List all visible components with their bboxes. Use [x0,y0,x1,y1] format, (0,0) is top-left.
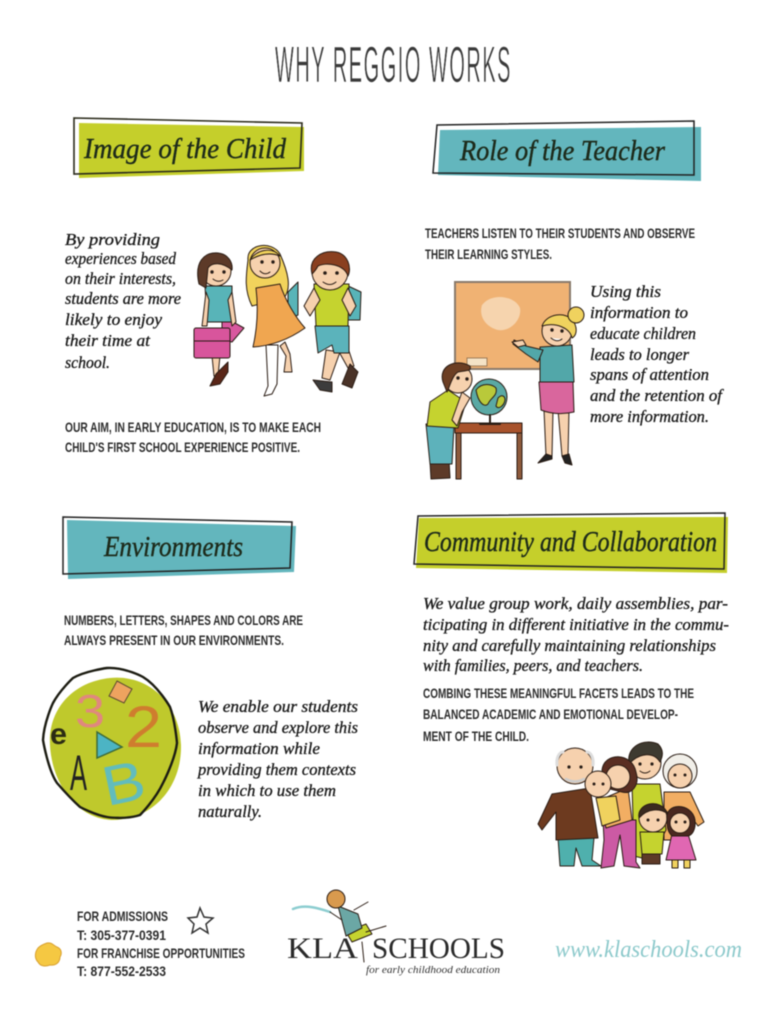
panel: environments [43,517,358,821]
heading: image of the child: Image of the Child [83,133,286,165]
board [455,282,570,369]
letter: B: B [97,748,151,818]
text: using this information: leads to longer [590,345,689,364]
text: we value group work: ticipating in different initiative in the commu- [423,615,729,634]
girl with pink bag [194,253,244,386]
teacher [512,307,584,465]
text: using this information [590,282,724,426]
text: teachers listen [425,225,695,262]
text: using this information: Using this [590,282,661,301]
grandfather [538,748,601,866]
text: we enable: We enable our students [198,697,358,716]
heading: image of the child [74,118,304,178]
text: numbers, letters [64,612,303,648]
text: combing these facets [423,685,694,744]
footer: contact details [35,908,245,979]
text: admissions and franchise phones: FOR ADMISSIONS [77,908,168,924]
icon: yellow blob [35,943,61,966]
boy at globe [426,363,472,479]
text: we enable: information while [198,739,320,758]
text: interests [65,230,181,372]
text: interests: experiences based [65,249,176,268]
heading: environments [63,517,296,579]
grandmother [663,754,704,840]
text: we value group work: We value group work, daily assemblies, par- [423,594,728,613]
heading: role of the teacher: Role of the Teacher [459,135,666,167]
text: admissions and franchise phones: T: 877-552-2533 [77,963,166,979]
icon: star [188,908,213,933]
boy with backpack [304,252,361,392]
panel: image of the child [65,118,361,455]
illustration: three children with backpacks [194,245,361,396]
table [455,423,522,479]
text: numbers, letters: NUMBERS, LETTERS, SHAPES AND COLORS ARE [64,612,303,628]
text: we enable: providing them contexts [197,760,356,779]
letter: e: e [50,718,67,751]
wordmark: SCHOOLS: SCHOOLS [372,932,505,965]
text: interests: students are more [65,289,181,308]
text: we enable: observe and explore this [198,718,358,737]
heading: community and collaboration: Community and Collaboration [424,527,717,558]
text: interests: their time at [65,331,151,350]
text: we enable: in which to use them [198,781,336,800]
text: we enable: naturally. [198,802,262,821]
text: we value group work: with families, peers, and teachers. [423,656,643,675]
heading: environments: Environments [103,531,243,563]
shape: blue triangle [97,732,122,758]
girl [666,806,696,868]
text: using this information: spans of attention [590,365,709,384]
text: using this information: information to [590,303,688,322]
text: interests: on their interests, [65,269,176,288]
text: admissions and franchise phones: FOR FRANCHISE OPPORTUNITIES [77,945,245,961]
icon: running kid [293,890,386,962]
text: using this information: and the retention of [590,386,724,405]
globe [471,379,507,424]
text: we value group work: nity and carefully maintaining relationships [423,636,716,655]
text: interests: school. [65,353,110,372]
father [629,742,666,860]
boy [639,804,668,864]
illustration: family [538,742,704,868]
website: www.klaschools.com [555,937,742,963]
text: we value group work [423,594,729,675]
text: our aim [65,419,321,455]
text: numbers, letters: ALWAYS PRESENT IN OUR ENVIRONMENTS. [64,632,284,648]
text: our aim: OUR AIM, IN EARLY EDUCATION, IS TO MAKE EACH [65,419,321,435]
illustration: teacher, board, boy and globe [426,282,584,479]
logo: KLA Schools [287,890,505,976]
text: interests: likely to enjoy [65,310,162,329]
panel: role of the teacher [425,121,724,479]
text: our aim: CHILD'S FIRST SCHOOL EXPERIENCE POSITIVE. [65,439,300,455]
mother and baby [585,757,640,868]
tagline: for early childhood education [366,964,501,976]
text: combing these facets: MENT OF THE CHILD. [423,728,529,744]
text: using this information: educate children [590,324,696,343]
girl in orange dress [246,245,305,396]
number: 3: 3 [75,685,105,737]
text: admissions and franchise phones [77,908,245,979]
icon: letters and shapes circle [43,668,181,820]
wordmark: KLA: KLA [287,932,358,965]
number: 2: 2 [125,695,162,760]
letter: A: A [70,745,87,801]
text: using this information: more information. [590,407,709,426]
panel: community and collaboration [414,513,729,868]
text: teachers listen: THEIR LEARNING STYLES. [425,246,552,262]
heading: role of the teacher [433,121,701,181]
text: admissions and franchise phones: T: 305-377-0391 [77,927,166,943]
text: interests: By providing [65,230,160,249]
text: we enable [197,697,358,821]
shape: orange square [109,681,132,703]
heading: community and collaboration [414,513,728,573]
text: combing these facets: BALANCED ACADEMIC AND EMOTIONAL DEVELOP- [423,706,678,722]
